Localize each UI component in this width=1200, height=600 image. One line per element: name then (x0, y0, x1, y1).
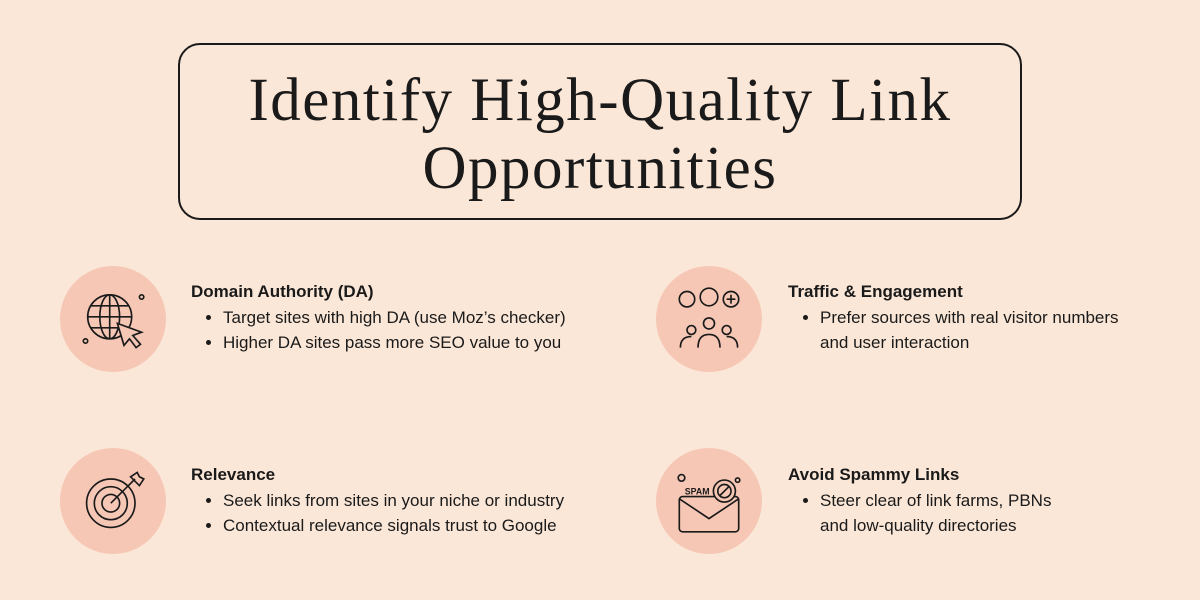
text: relevance (191, 465, 564, 535)
icon: spam envelope: SPAM (685, 486, 710, 496)
title: Identify High-Quality Link (248, 67, 952, 134)
text: avoid spammy: Avoid Spammy Links (788, 465, 959, 484)
text: traffic: Prefer sources with real visitor numbers (820, 308, 1119, 326)
text: domain authority: Domain Authority (DA) (191, 282, 374, 301)
icon: spam envelope (656, 448, 762, 554)
text: avoid spammy: and low-quality directories (820, 516, 1017, 535)
text: avoid spammy: Steer clear of link farms, PBNs (820, 490, 1051, 510)
text: relevance: Contextual relevance signals trust to Google (223, 516, 557, 535)
text: traffic: Traffic & Engagement (788, 282, 963, 301)
text: domain authority (191, 282, 566, 352)
text: traffic: and user interaction (820, 333, 969, 352)
text: relevance: Seek links from sites in your niche or industry (223, 490, 564, 510)
text: domain authority: Higher DA sites pass more SEO value to you (223, 333, 561, 352)
text: relevance: Relevance (191, 465, 275, 484)
icon: people engagement (656, 266, 762, 372)
text: domain authority: Target sites with high DA (use Moz’s checker) (223, 308, 566, 326)
title (178, 43, 1022, 220)
text: traffic (788, 282, 1119, 352)
text: avoid spammy (788, 465, 1051, 535)
icon: globe with cursor (60, 266, 166, 372)
icon: target (60, 448, 166, 554)
title: Opportunities (422, 135, 777, 202)
